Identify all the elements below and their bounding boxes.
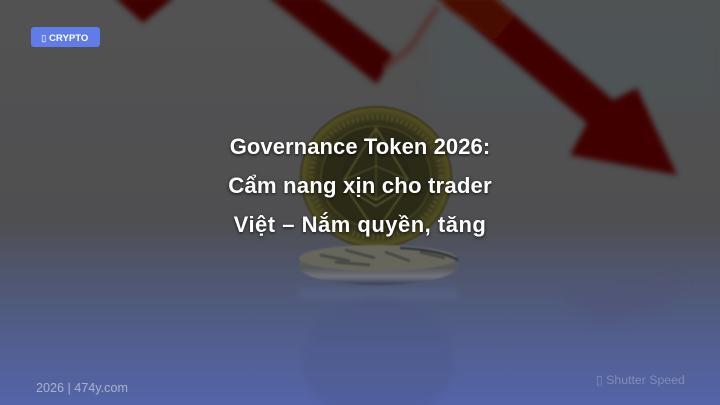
category badge: ▯ CRYPTO — [41, 33, 88, 44]
title: Governance Token 2026: — [230, 134, 490, 159]
title — [228, 134, 492, 240]
category badge — [31, 27, 100, 47]
coin stack base — [298, 245, 458, 285]
arrow reflection — [565, 282, 685, 325]
coin — [300, 106, 452, 248]
title: Việt – Nắm quyền, tăng — [234, 212, 486, 237]
photo credit: ▯ Shutter Speed — [596, 373, 685, 387]
coin reflection — [298, 288, 458, 405]
title: Cẩm nang xịn cho trader — [228, 173, 492, 198]
footer: year and site: 2026 | 474y.com — [36, 381, 128, 395]
